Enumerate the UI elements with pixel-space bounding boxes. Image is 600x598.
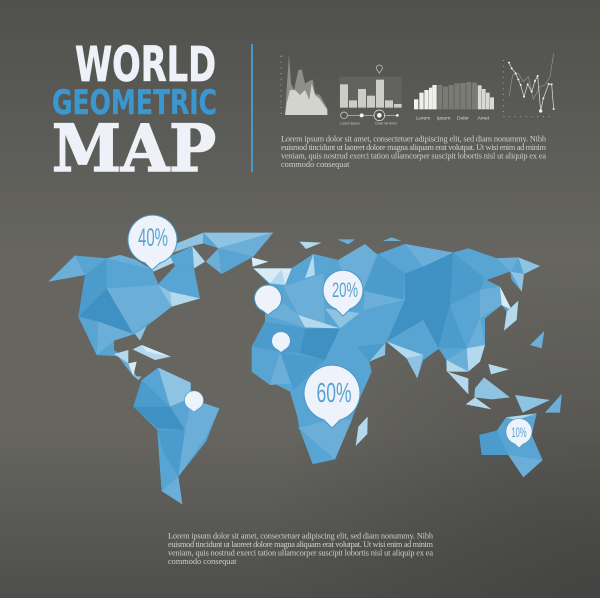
callout: blank North Africa pin [272, 332, 290, 352]
callout: 10% [506, 419, 532, 448]
Canadian arctic and Greenland [152, 233, 273, 274]
title [52, 37, 217, 187]
South America [133, 368, 219, 504]
chart: area [281, 54, 327, 116]
charts row [281, 53, 555, 126]
Central America and Caribbean [114, 345, 171, 380]
title line: WORLD: WORLD [75, 37, 216, 93]
header paragraph: veniam, quis nostrud exerci tation ullamcorper suscipit lobortis nisl ut aliquip ex ea [281, 152, 546, 160]
header paragraph [281, 134, 547, 169]
title line: GEOMETRIC: GEOMETRIC [52, 83, 217, 123]
callouts [128, 215, 532, 448]
header divider [251, 44, 253, 172]
Eurasia, Africa, Australia and islands [252, 237, 562, 477]
chart: column silhouette: Ipsum [437, 115, 450, 121]
title line: MAP: MAP [52, 111, 216, 187]
footer paragraph [168, 532, 434, 566]
chart: column silhouette: Amet [478, 115, 490, 121]
callout: 40%: 40% [138, 224, 168, 252]
chart: column silhouette [414, 82, 494, 121]
footer paragraph: Lorem ipsum dolor sit amet, consectetuer adipiscing elit, sed diam nonummy. Nibh [168, 532, 434, 540]
Africa [252, 322, 305, 353]
Asia [363, 254, 405, 300]
callout: 20%: 20% [332, 279, 358, 302]
chart: line plot [503, 53, 555, 117]
footer paragraph: veniam, quis nostrud exerci tation ullamcorper suscipit lobortis nisl ut aliquip ex ea [168, 548, 433, 558]
footer paragraph: commodo consequat [168, 557, 237, 566]
callout: 20% [323, 270, 363, 316]
world map [48, 233, 562, 504]
chart: bars with slider: Dolor Sit Amet [375, 122, 397, 126]
footer paragraph: euismod tincidunt ut laoreet dolore magna aliquam erat volutpat. Ut wisi enim ad minim [168, 540, 434, 549]
Europe [253, 268, 292, 283]
header paragraph: commodo consequat [281, 160, 350, 169]
Eurasia and Africa landmass [252, 244, 540, 464]
callout: 60%: 60% [316, 377, 352, 408]
Australia [479, 413, 543, 477]
callout: blank South America pin [185, 391, 204, 412]
chart: column silhouette: Dolor [457, 115, 469, 121]
callout: 60% [304, 365, 360, 428]
chart: bars with slider: Lorem Ipsum [340, 122, 360, 126]
North America and Greenland [48, 233, 273, 380]
chart: column silhouette: Lorem [416, 115, 430, 121]
chart: bars with slider [339, 65, 402, 126]
callout: blank Europe pin [254, 285, 282, 315]
callout: 40% [128, 215, 177, 270]
header paragraph: Lorem ipsum dolor sit amet, consectetuer adipiscing elit, sed diam nonummy. Nibh [281, 134, 547, 144]
Madagascar [356, 417, 368, 446]
header paragraph: euismod tincidunt ut laoreet dolore magna aliquam erat volutpat. Ut wisi enim ad minim [281, 143, 547, 152]
Northern and eastern islands [252, 237, 562, 413]
callout: 10%: 10% [512, 424, 526, 440]
